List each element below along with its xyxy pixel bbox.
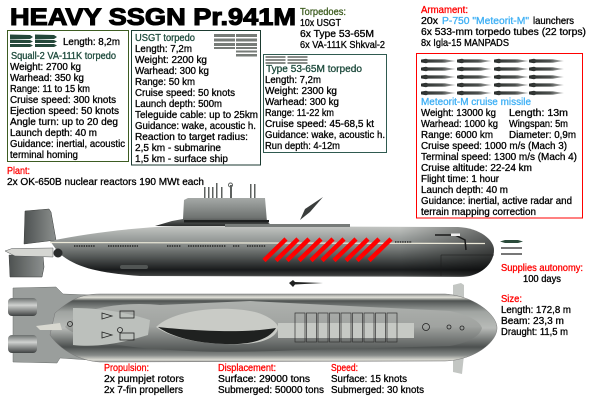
plant text: 2x OK-650B nuclear reactors 190 MWt each (7, 177, 204, 188)
forward planes (453, 283, 464, 300)
title: HEAVY SSGN Pr.941M (10, 4, 296, 31)
centre compartment (156, 309, 278, 344)
bow sonar details (435, 235, 494, 276)
panel: Squall-2 torpedo: Angle turn: up to 20 deg (10, 117, 118, 128)
inner hull (65, 301, 482, 352)
pressure hull (50, 226, 494, 277)
armament list: 8x Igla-15 MANPADS (421, 38, 509, 49)
panel: Type 53-65M torpedo: Range: 11-22 km (265, 108, 334, 119)
panel: Meteorit-M cruise missile: Weight: 13000 kg (421, 108, 496, 119)
supplies autonomy: Supplies autonomy: (501, 263, 583, 274)
panel: Meteorit-M cruise missile: Launch depth: 40 m (421, 185, 508, 196)
panel: Squall-2 torpedo: Cruise speed: 300 knots (10, 95, 116, 106)
propulsion: 2x 7-fin propellers (104, 385, 183, 396)
armament list: Armament: (421, 5, 468, 16)
missile tube grid (295, 313, 397, 342)
icon: diagonal missile (300, 197, 323, 220)
size: Length: 172,8 m (501, 305, 571, 316)
panel: Meteorit-M cruise missile: Cruise altitude: 22-24 km (421, 163, 532, 174)
compartment shadow (158, 327, 276, 344)
size: Size: (501, 294, 522, 305)
speed: Surface: 15 knots (331, 374, 407, 385)
centre band (278, 323, 414, 338)
panel: Meteorit-M cruise missile: Meteorit-M cruise missile (421, 97, 531, 108)
panel: Squall-2 torpedo: terminal homing (10, 150, 78, 161)
panel: Squall-2 torpedo: Weight: 2700 kg (10, 62, 81, 73)
panel: Type 53-65M torpedo: Type 53-65M torpedo (266, 64, 362, 75)
displacement (218, 363, 324, 396)
icon: small torpedoes (500, 240, 523, 255)
icon: Squall torpedoes (10, 34, 57, 47)
size: Beam: 23,3 m (501, 316, 564, 327)
panel: Type 53-65M torpedo: Cruise speed: 45-68,5 kt (265, 119, 374, 130)
panel: Type 53-65M torpedo (264, 54, 386, 152)
displacement: Surface: 29000 tons (218, 374, 310, 385)
panel: Meteorit-M cruise missile: Guidance: inertial, active radar and (421, 196, 572, 207)
panel: Meteorit-M cruise missile: Terminal speed: 1300 m/s (Mach 4) (421, 152, 577, 163)
diagram: submarine side view (5, 183, 494, 277)
forward deck fittings (68, 311, 464, 340)
upper rudder (24, 209, 56, 244)
panel: Squall-2 torpedo: Ejection speed: 50 knots (10, 106, 119, 117)
panel: USGT torpedo: 1,5 km - surface ship (135, 154, 228, 165)
panel: Type 53-65M torpedo: Length: 7,2m (265, 75, 321, 86)
torpedoes list: Torpedoes: (300, 7, 346, 18)
size (501, 294, 571, 338)
propulsion: 2x pumpjet rotors (104, 374, 184, 385)
panel: Meteorit-M cruise missile: Diameter: 0,9m (509, 130, 576, 141)
panel: Meteorit-M cruise missile: Wingspan: 5m (509, 119, 568, 130)
panel: USGT torpedo: Length: 7,2m (135, 44, 192, 55)
panel: Meteorit-M cruise missile: Length: 13m (509, 108, 568, 119)
supplies autonomy (501, 263, 583, 285)
plant text: Plant: (7, 166, 30, 177)
armament list: P-750 "Meteorit-M" (442, 16, 529, 27)
panel: USGT torpedo: Guidance: wake, acoustic h. (135, 121, 256, 132)
hull deck band (225, 224, 350, 227)
panel: Squall-2 torpedo: Squall-2 VA-111K torpedo (11, 51, 116, 62)
propulsion: Propulsion: (104, 363, 149, 374)
panel: Squall-2 torpedo: Range: 11 to 15 km (10, 84, 90, 95)
panel: Type 53-65M torpedo: Warhead: 300 kg (265, 97, 339, 108)
panel: Meteorit-M cruise missile: terrain mapping correction (421, 207, 536, 218)
panel: Squall-2 torpedo: Length: 8,2m (63, 37, 120, 48)
panel: Meteorit-M cruise missile: Flight time: 1 hour (421, 174, 500, 185)
panel: USGT torpedo: Launch depth: 500m (135, 99, 222, 110)
panel: USGT torpedo: 2,5 km - submarine (135, 143, 221, 154)
icon: Type 53-65M torpedoes (266, 56, 308, 64)
torpedoes list: 6x VA-111K Shkval-2 (300, 40, 385, 51)
missile silos (264, 239, 391, 260)
armament list: launchers (533, 16, 574, 27)
size: Draught: 11,5 m (501, 327, 568, 338)
panel: Squall-2 torpedo: Guidance: inertial, acoustic (10, 139, 125, 150)
aft deck (73, 308, 150, 346)
panel: Squall-2 torpedo (8, 30, 128, 162)
panel: USGT torpedo: Reaction to target radius: (135, 132, 248, 143)
panel: Meteorit-M cruise missile: Cruise speed: 1000 m/s (Mach 3) (421, 141, 567, 152)
torpedoes list: 10x USGT (300, 18, 341, 29)
panel: Squall-2 torpedo: Warhead: 350 kg (10, 73, 84, 84)
speed (331, 363, 424, 396)
propulsion (104, 363, 184, 396)
keel fairing (120, 265, 148, 269)
aft pods (8, 298, 37, 316)
lower rudder (9, 255, 44, 277)
bow shading (400, 227, 494, 277)
portholes (74, 242, 412, 246)
panel: Meteorit-M cruise missile: Range: 6000 km (421, 130, 493, 141)
icon: missile rows (421, 59, 564, 95)
armament list: 20x (421, 16, 438, 27)
panel: USGT torpedo: Warhead: 300 kg (135, 66, 209, 77)
panel: Type 53-65M torpedo: Weight: 2300 kg (265, 86, 337, 97)
panel: USGT torpedo (132, 30, 260, 165)
panel: Meteorit-M cruise missile (416, 54, 582, 218)
icon: USGT torpedoes (214, 34, 257, 56)
panel: USGT torpedo: Cruise speed: 50 knots (135, 88, 235, 99)
conning tower (155, 198, 273, 226)
torpedoes list: 6x Type 53-65M (300, 29, 374, 40)
stern nozzle (5, 248, 53, 257)
masts (204, 183, 256, 198)
hull (50, 294, 497, 362)
panel: Meteorit-M cruise missile: Warhead: 1000 kg (421, 119, 498, 130)
panel: Type 53-65M torpedo: Run depth: 4-12m (265, 141, 340, 152)
panel: Squall-2 torpedo: Launch depth: 40 m (10, 128, 97, 139)
armament list: 6x 533-mm torpedo tubes (22 torps) (421, 27, 586, 38)
panel: USGT torpedo: USGT torpedo (135, 33, 195, 44)
plant text (7, 166, 204, 188)
panel: Type 53-65M torpedo: Guidance: wake, acoustic h. (265, 130, 385, 141)
diagram: submarine top view (8, 283, 497, 374)
panel: USGT torpedo: Weight: 2200 kg (135, 55, 207, 66)
armament list (421, 5, 586, 49)
displacement: Displacement: (218, 363, 276, 374)
speed: Submerged: 30 knots (331, 385, 424, 396)
speed: Speed: (331, 363, 358, 374)
icon: small horizontal missile (289, 280, 323, 287)
panel: USGT torpedo: Range: 50 km (135, 77, 195, 88)
panel: USGT torpedo: Teleguide cable: up to 25km (135, 110, 258, 121)
supplies autonomy: 100 days (523, 274, 561, 285)
displacement: Submerged: 50000 tons (218, 385, 324, 396)
hull light line (50, 242, 485, 244)
stern stabilisers (13, 287, 90, 363)
torpedoes list (300, 7, 385, 51)
